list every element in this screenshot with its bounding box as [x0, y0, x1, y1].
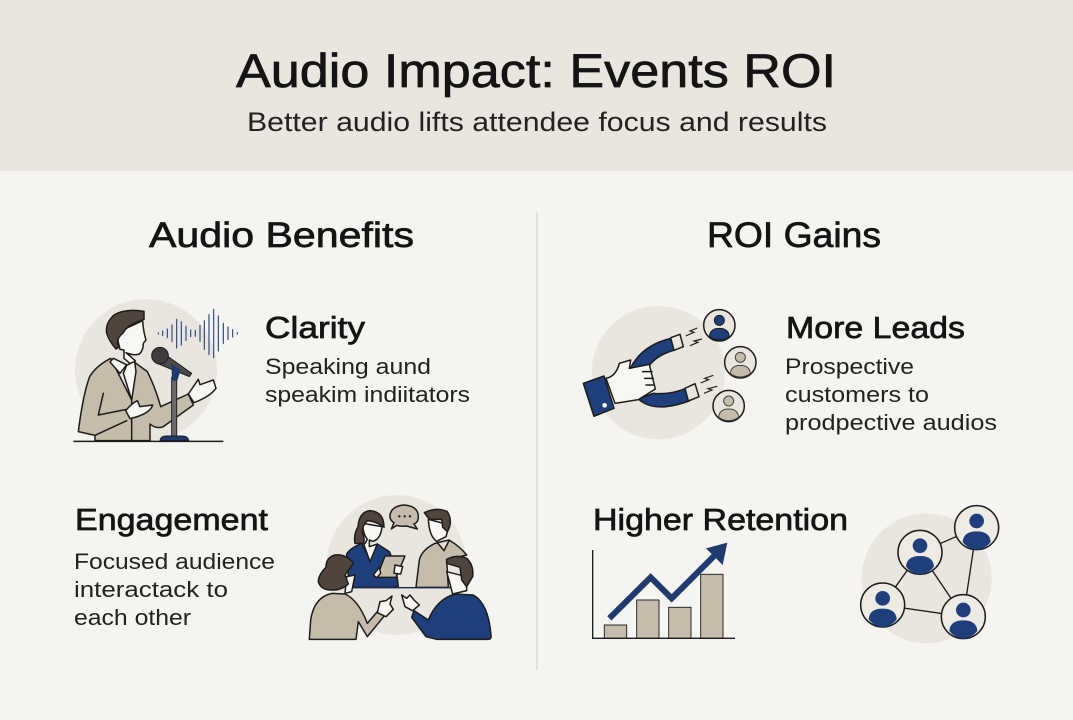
avatar top — [704, 310, 735, 341]
icon: team in conversation — [309, 495, 491, 639]
table edge — [349, 586, 453, 590]
heading: Engagement: Engagement — [75, 502, 268, 537]
floor line — [73, 439, 223, 444]
block: More Leads — [785, 310, 997, 435]
man standing — [416, 509, 467, 587]
magnet — [630, 338, 675, 369]
avatar middle — [725, 347, 756, 378]
icon: bar chart with rising arrow — [593, 543, 735, 638]
sound wave — [158, 309, 237, 358]
front hand — [126, 401, 153, 419]
microphone stand — [172, 377, 177, 437]
node lower right — [941, 595, 985, 639]
icon: hand holding magnet attracting people — [583, 306, 756, 439]
cuff — [583, 376, 614, 416]
description: Clarity: Speaking aund — [265, 354, 431, 379]
description: Engagement: Focused audience — [74, 549, 275, 574]
sparks — [686, 328, 717, 393]
woman seated — [309, 555, 393, 639]
description: More Leads — [785, 354, 997, 435]
hair — [106, 310, 144, 349]
subtitle: Better audio lifts attendee focus and results — [247, 107, 827, 137]
description: Clarity: speakim indiitators — [265, 382, 470, 407]
bars — [604, 574, 723, 638]
title: Audio Impact: Events ROI — [236, 44, 836, 97]
heading: More Leads: More Leads — [786, 310, 965, 345]
axes — [593, 550, 735, 638]
speech bubble — [390, 505, 418, 529]
avatar bottom — [713, 390, 744, 422]
rising arrow — [609, 543, 727, 618]
block: Clarity — [265, 310, 470, 407]
jacket — [78, 358, 193, 441]
icon: people network — [861, 506, 999, 643]
description: Engagement — [74, 549, 275, 630]
raised hand — [188, 379, 216, 403]
description: More Leads: prodpective audios — [785, 410, 997, 435]
node left — [861, 583, 905, 627]
description: More Leads: Prospective — [785, 354, 914, 379]
heading: Higher Retention: Higher Retention — [593, 502, 848, 537]
microphone — [159, 356, 192, 377]
description: Engagement: interactack to — [74, 577, 228, 602]
icon: speaker at microphone — [73, 299, 237, 441]
woman with tablet — [347, 511, 405, 587]
node top — [898, 530, 942, 574]
heading: Clarity: Clarity — [265, 310, 366, 345]
block: Engagement — [74, 502, 275, 630]
connections — [883, 528, 977, 617]
face and neck — [117, 321, 146, 365]
heading: Audio Benefits: Audio Benefits — [149, 216, 414, 255]
header band — [0, 0, 1073, 171]
heading: ROI Gains: ROI Gains — [707, 216, 881, 255]
description: Engagement: each other — [74, 605, 192, 630]
man seated — [402, 556, 491, 639]
hand — [606, 360, 655, 403]
collar — [110, 358, 127, 373]
description: More Leads: customers to — [785, 382, 929, 407]
node upper right — [955, 506, 999, 550]
description: Clarity — [265, 354, 470, 407]
